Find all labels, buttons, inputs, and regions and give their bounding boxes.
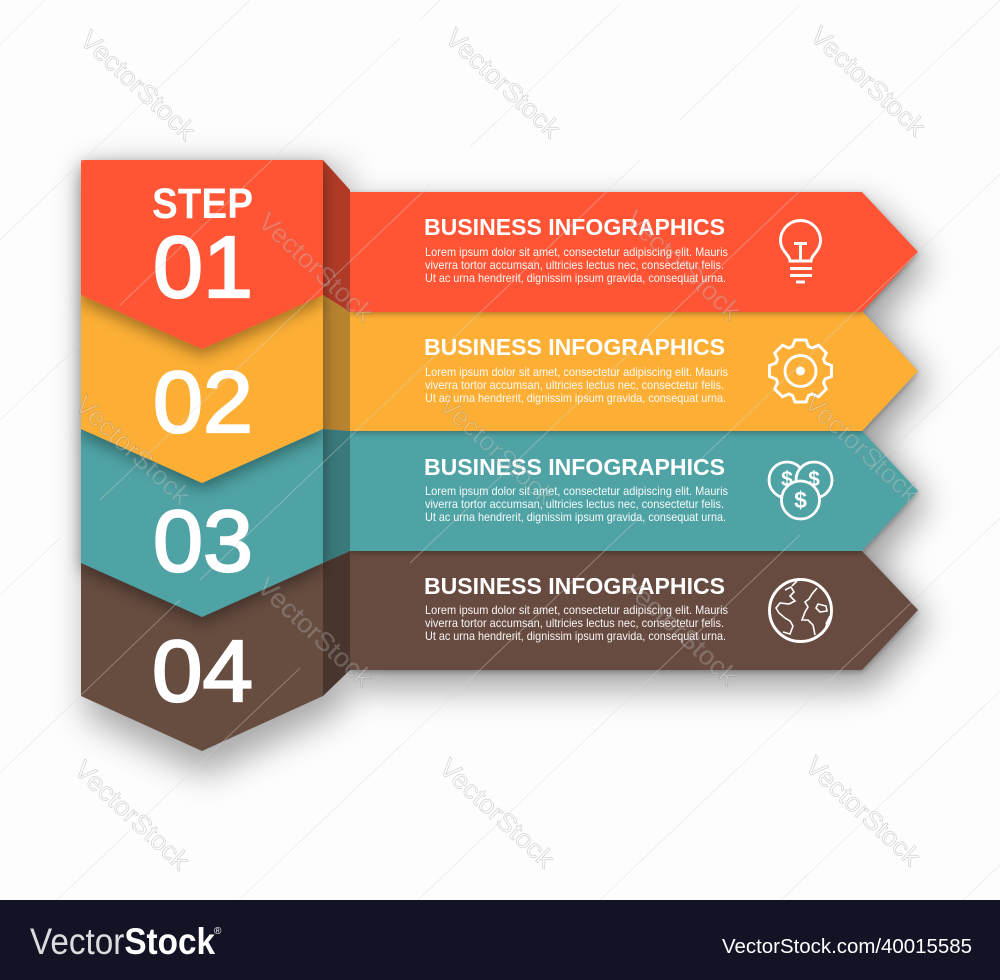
number 03: 03 (153, 493, 253, 590)
body 3 (425, 485, 728, 524)
chevron 02: orange (81, 295, 323, 483)
heading 2: BUSINESS INFOGRAPHICS (424, 334, 725, 360)
side: orange (323, 295, 350, 431)
side: teal (323, 429, 350, 563)
column side face (323, 160, 350, 696)
side: red (323, 160, 350, 312)
chevron 04: brown (81, 563, 323, 751)
body 4: Lorem ipsum dolor sit amet, consectetur adipiscing elit. Mauris (425, 604, 728, 617)
text block 1 (424, 214, 728, 285)
chevron 01: red (81, 160, 323, 349)
side: brown (323, 551, 350, 696)
column ground shadow (86, 168, 345, 775)
body 3: Ut ac urna hendrerit, dignissim ipsum gravida, consequat urna. (425, 511, 726, 524)
watermarks: VectorStock (799, 750, 927, 872)
watermarks: VectorStock (804, 20, 932, 142)
watermarks: VectorStock (433, 752, 561, 874)
step label: STEP (152, 180, 253, 228)
footer url: VectorStock.com/40015585 (722, 936, 972, 958)
icon: coins: $ (794, 487, 807, 513)
number 01: 01 (153, 219, 253, 316)
body 2: viverra tortor accumsan, ultricies lectus nec, consectetur felis. (425, 379, 724, 392)
body 2: Lorem ipsum dolor sit amet, consectetur adipiscing elit. Mauris (425, 366, 728, 379)
watermarks: VectorStock (252, 206, 380, 328)
watermarks: VectorStock (798, 387, 926, 509)
number 02: 02 (153, 354, 253, 451)
chevron 03: teal (81, 429, 323, 617)
icon: gear (770, 340, 832, 402)
arrow bars (350, 192, 918, 670)
bars ground shadow (350, 205, 928, 688)
bar 3: teal (350, 431, 918, 551)
icon: globe (770, 580, 832, 642)
registered mark: ® (214, 926, 222, 937)
footer bar (0, 900, 1000, 980)
body 1: Ut ac urna hendrerit, dignissim ipsum gravida, consequat urna. (425, 272, 726, 285)
body 1: viverra tortor accumsan, ultricies lectus nec, consectetur felis. (425, 259, 724, 272)
watermarks: VectorStock (74, 24, 202, 146)
text block 3 (424, 454, 728, 524)
icon: light bulb (780, 221, 820, 282)
watermarks: VectorStock (251, 571, 379, 693)
step column (81, 160, 323, 751)
number 04: 04 (152, 623, 253, 720)
icon: coins: $ (781, 468, 793, 491)
body 4: Ut ac urna hendrerit, dignissim ipsum gravida, consequat urna. (425, 630, 726, 643)
body 2 (425, 366, 728, 405)
body 4: viverra tortor accumsan, ultricies lectus nec, consectetur felis. (425, 617, 724, 630)
body 1: Lorem ipsum dolor sit amet, consectetur adipiscing elit. Mauris (425, 246, 728, 259)
icon: coins: $ (808, 468, 820, 491)
bar 2: orange (350, 311, 918, 431)
watermarks: VectorStock (433, 389, 561, 511)
bar 4: brown (350, 551, 918, 670)
watermarks: VectorStock (616, 569, 744, 691)
heading 4: BUSINESS INFOGRAPHICS (424, 573, 725, 599)
body 4 (425, 604, 728, 643)
icon: coins (769, 462, 832, 519)
footer logo: VectorStock (30, 921, 215, 962)
heading 3: BUSINESS INFOGRAPHICS (424, 454, 725, 480)
body 1 (425, 246, 728, 285)
watermarks: VectorStock (619, 204, 747, 326)
text block 4 (424, 573, 728, 643)
watermarks: VectorStock (69, 389, 197, 511)
body 3: viverra tortor accumsan, ultricies lectus nec, consectetur felis. (425, 498, 724, 511)
watermarks (68, 20, 932, 876)
body 2: Ut ac urna hendrerit, dignissim ipsum gravida, consequat urna. (425, 392, 726, 405)
body 3: Lorem ipsum dolor sit amet, consectetur adipiscing elit. Mauris (425, 485, 728, 498)
watermarks: VectorStock (68, 754, 196, 876)
bar 1: red (350, 192, 918, 312)
watermarks: VectorStock (439, 22, 567, 144)
heading 1: BUSINESS INFOGRAPHICS (424, 214, 725, 240)
text block 2 (424, 334, 728, 405)
